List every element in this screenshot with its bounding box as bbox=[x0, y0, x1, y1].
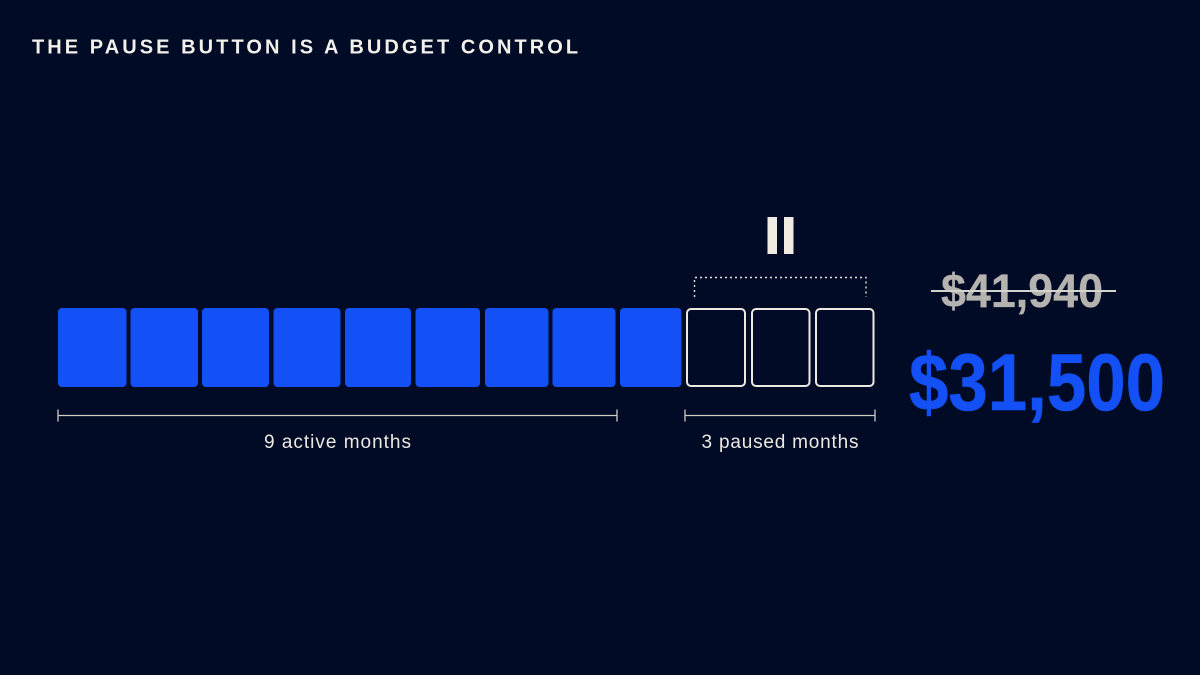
active months bar bbox=[58, 308, 682, 387]
bracket: 9 active months bbox=[58, 410, 617, 422]
title: THE PAUSE BUTTON IS A BUDGET CONTROL bbox=[32, 36, 581, 58]
bracket: 3 paused months bbox=[685, 410, 875, 422]
label: 3 paused months: 3 paused months bbox=[702, 432, 858, 453]
dotted bracket over paused months bbox=[694, 278, 866, 297]
old price struck through: $41,940 bbox=[941, 264, 1103, 317]
label: 9 active months: 9 active months bbox=[264, 432, 411, 453]
new price: $31,500 bbox=[909, 338, 1165, 428]
icon: pause bbox=[768, 217, 794, 254]
paused months bar bbox=[687, 309, 874, 386]
